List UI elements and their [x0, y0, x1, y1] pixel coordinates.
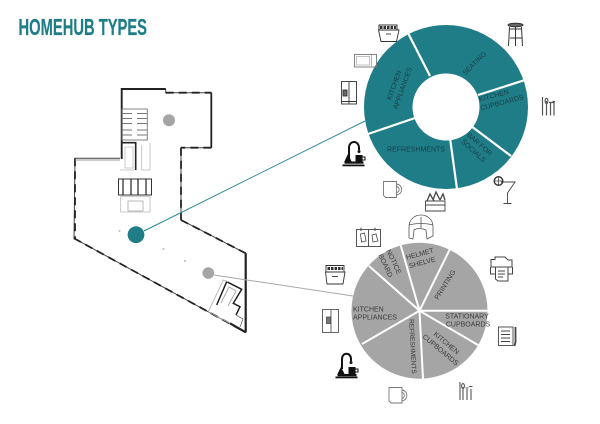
icon: fridge (donut) — [342, 82, 356, 104]
icon: notepad and pen — [498, 327, 516, 346]
donut chart — [364, 25, 528, 189]
label: kitchen appliances: KITCHEN — [353, 306, 384, 314]
marker: grey lower — [202, 267, 214, 279]
label: bar for socials: SOCIALS — [459, 139, 487, 164]
floor plan — [74, 89, 246, 332]
label: refreshments: REFRESHMENTS — [387, 146, 445, 154]
connector: teal to donut — [144, 121, 365, 231]
icon: dishwasher (donut) — [378, 25, 399, 42]
icon: notice board — [356, 228, 380, 246]
marker: grey upper — [163, 114, 175, 126]
label: refreshments: REFRESHMENTS — [407, 319, 417, 374]
icon: bar stool — [508, 23, 523, 46]
label: stationary cupboards: CUPBOARDS — [446, 322, 491, 328]
floor plan thick walls — [74, 89, 246, 332]
icon: fridge (pie) — [322, 310, 338, 332]
icon: mug (pie) — [389, 388, 407, 403]
label: notice board: BOARD — [376, 253, 393, 279]
label: kitchen appliances: APPLIANCES — [353, 314, 397, 322]
label: stationary cupboards: STATIONARY — [445, 313, 489, 320]
label: kitchen cupboards: KITCHEN — [432, 331, 460, 356]
label: kitchen cupboards: CUPBOARDS — [480, 94, 525, 112]
label: kitchen appliances: KITCHEN — [386, 70, 403, 101]
label: helmet shelve: SHELVE — [408, 256, 437, 270]
icon: microwave — [354, 54, 376, 67]
icon: fruit basket — [426, 192, 445, 211]
title: HOMEHUB TYPES — [18, 14, 147, 40]
floor plan thin outline — [74, 89, 246, 332]
label: kitchen cupboards: CUPBOARDS — [421, 334, 460, 368]
column dots — [118, 230, 186, 262]
connector: grey to pie — [214, 275, 353, 296]
icon: mug (donut) — [384, 182, 402, 198]
icon: cutlery (donut) — [542, 97, 555, 116]
label: notice board: NOTICE — [384, 249, 402, 276]
label: kitchen appliances: APPLIANCES — [392, 66, 414, 110]
lower service core — [208, 280, 246, 332]
pie chart — [352, 243, 491, 379]
icon: cutlery (pie) — [460, 382, 472, 400]
label: helmet shelve: HELMET — [405, 247, 435, 262]
marker: teal — [128, 226, 144, 243]
label: bar for socials: BAR FOR — [465, 132, 493, 158]
icon: helmet — [409, 215, 433, 239]
icon: tap and sink (pie) — [336, 354, 358, 378]
label: printing: PRINTING — [434, 269, 458, 301]
icon: tap and sink (donut) — [343, 142, 365, 166]
icon: printer — [490, 257, 512, 281]
label: seating: SEATING — [462, 51, 488, 77]
icon: dishwasher (pie) — [326, 266, 345, 284]
label: kitchen cupboards: KITCHEN — [478, 89, 510, 104]
icon: cocktail glass — [494, 177, 515, 204]
toilets block — [122, 109, 147, 140]
stair core — [118, 143, 152, 212]
